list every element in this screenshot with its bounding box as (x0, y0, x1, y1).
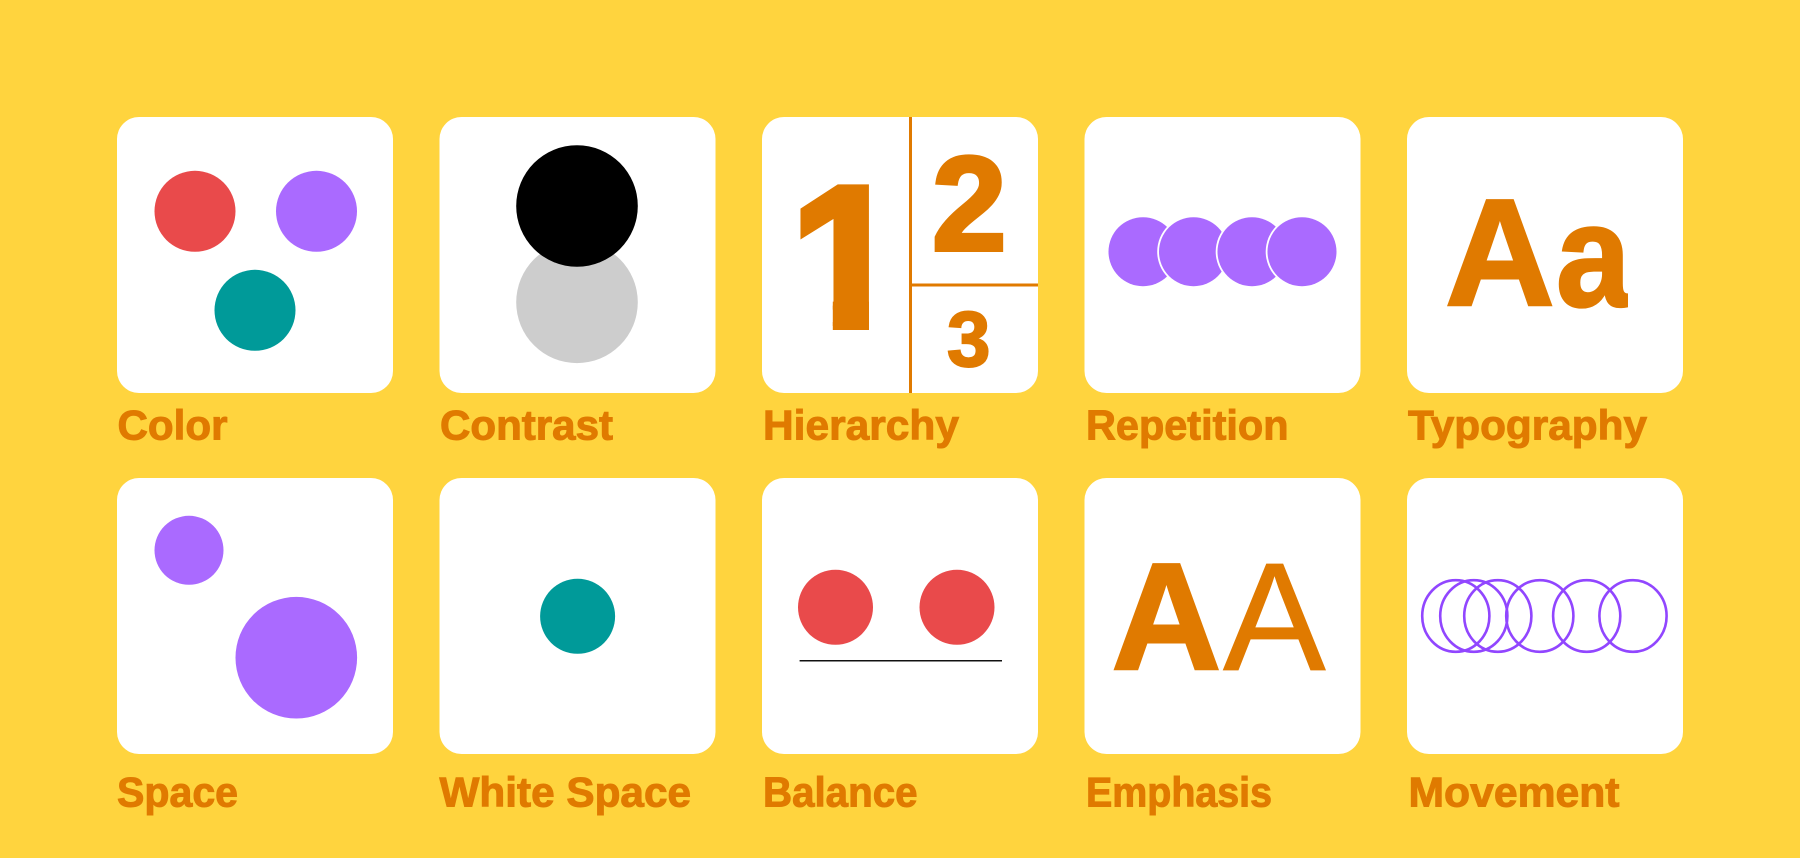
panel: white space (440, 478, 716, 754)
icon: circle 3 (1216, 215, 1288, 288)
icon: black circle (516, 145, 638, 267)
icon: left circle (798, 570, 873, 645)
icon: right circle (920, 570, 994, 645)
label: space: Space (117, 769, 238, 816)
label: balance: Balance (763, 769, 918, 816)
number 3: 3 (947, 295, 990, 383)
icon: circle 4 (1266, 215, 1338, 288)
icon: circle 1 (1108, 217, 1178, 286)
letter bold A: A (1112, 532, 1221, 702)
panel: hierarchy (762, 117, 1038, 393)
label: emphasis: Emphasis (1086, 769, 1272, 816)
icon: red circle (154, 171, 236, 252)
panel: movement (1407, 478, 1683, 754)
panel: contrast (440, 117, 716, 393)
panel: color (117, 117, 393, 393)
panel: balance (762, 478, 1038, 754)
icon: teal circle (540, 579, 615, 654)
letters Aa: a (1556, 174, 1632, 337)
icon: large circle (235, 597, 357, 718)
label: typography: Typography (1408, 401, 1648, 448)
baseline (800, 660, 1002, 662)
panel: emphasis (1084, 478, 1360, 754)
letters Aa: A (1445, 168, 1555, 338)
panel: typography (1407, 117, 1683, 393)
label: color: Color (118, 401, 228, 448)
letters Aa (1447, 199, 1628, 309)
label: contrast: Contrast (440, 401, 613, 448)
label: movement: Movement (1408, 769, 1620, 816)
letter regular A: A (1223, 531, 1326, 703)
icon: circle 2 (1157, 215, 1230, 288)
icon: grey circle (516, 241, 638, 363)
icon: purple circle (276, 171, 357, 252)
vertical divider (909, 117, 912, 393)
number 2: 2 (932, 130, 1007, 279)
horizontal divider (912, 284, 1038, 286)
panel: space (117, 478, 393, 754)
label: hierarchy: Hierarchy (763, 401, 960, 448)
icon: moving circles (1422, 580, 1667, 652)
label: repetition: Repetition (1086, 401, 1288, 448)
icon: small circle (154, 516, 224, 585)
label: white space: White Space (440, 769, 691, 816)
icon: teal circle (214, 270, 296, 351)
number 1: 1 (791, 146, 902, 369)
panel: repetition (1084, 117, 1360, 393)
